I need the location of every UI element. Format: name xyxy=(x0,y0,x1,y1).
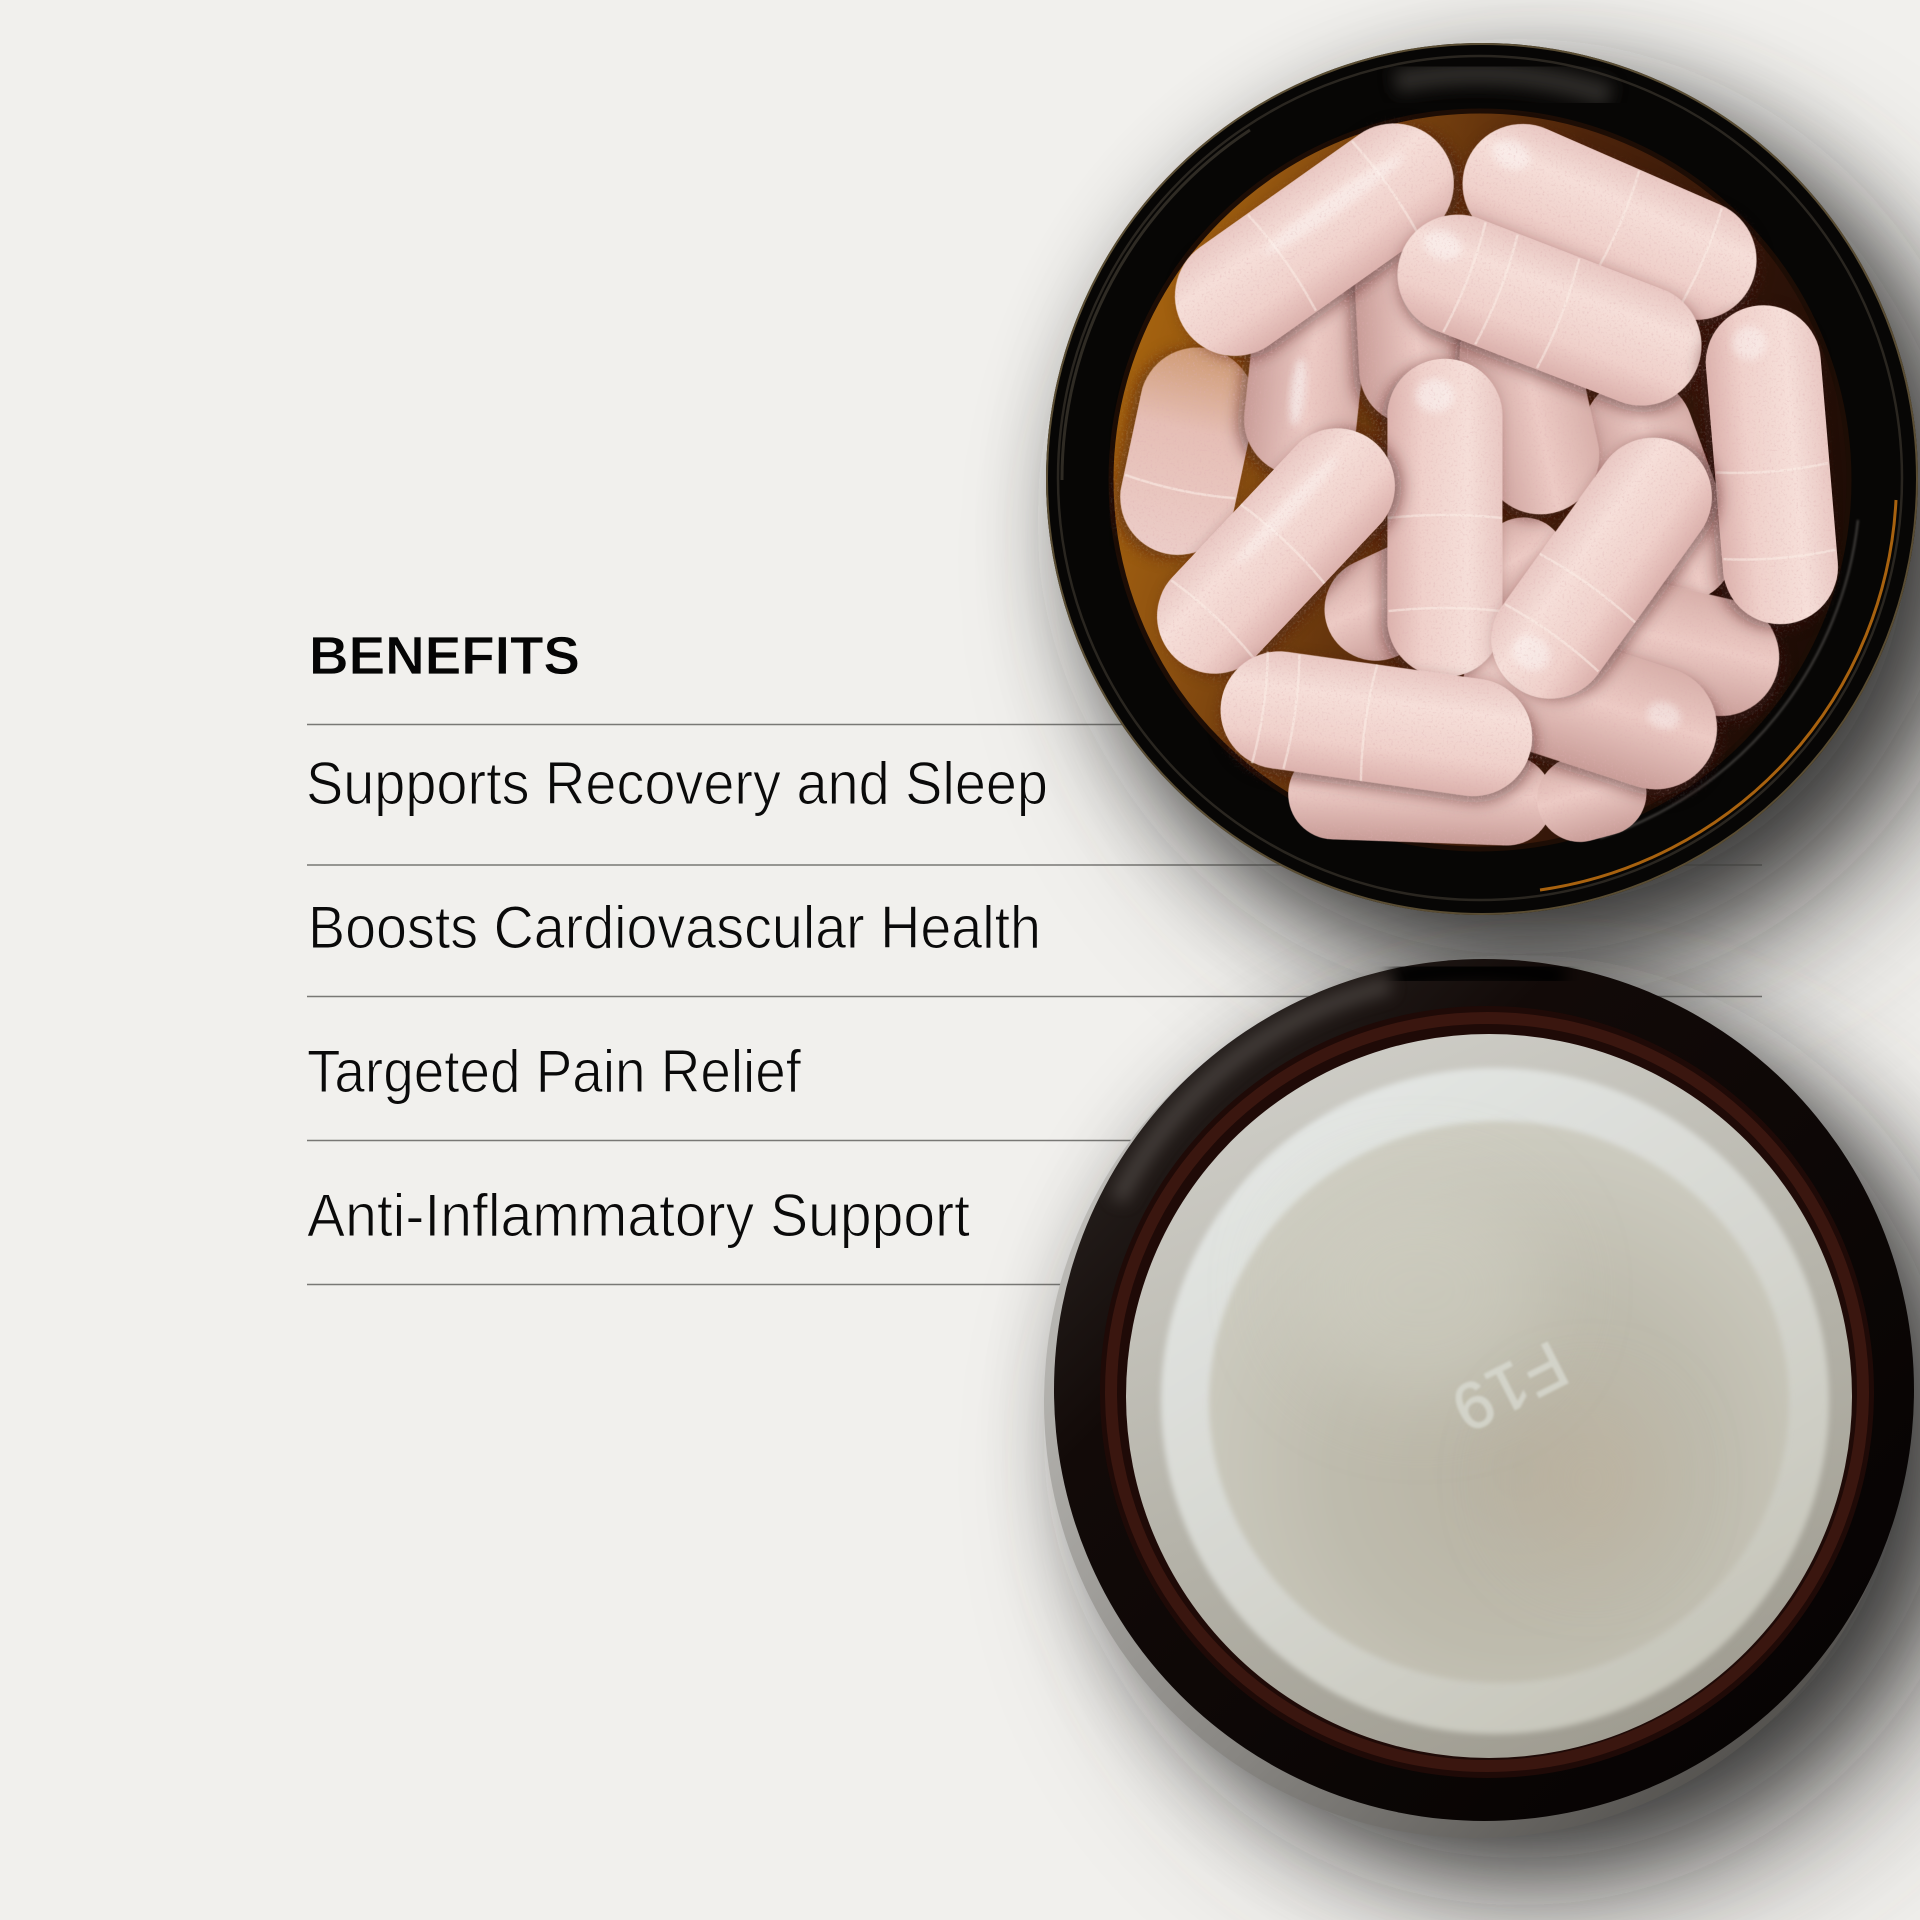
lid rim xyxy=(1054,959,1914,1821)
capsule centre vertical xyxy=(1387,359,1502,677)
rear capsules xyxy=(1110,213,1791,852)
warm glow on liner xyxy=(1520,1400,1660,1560)
benefit: recovery and sleep: Supports Recovery and Sleep xyxy=(306,750,1048,817)
liner outer disc xyxy=(1126,1034,1852,1758)
liner centre disc xyxy=(1209,1121,1789,1683)
benefit: pain relief: Targeted Pain Relief xyxy=(307,1038,801,1105)
liner pale ring xyxy=(1161,1068,1829,1734)
brown inner ring xyxy=(1100,1006,1874,1778)
moulded mark: F19: F19 xyxy=(1441,1327,1579,1447)
capsule middle xyxy=(1380,197,1719,423)
open jar with capsules xyxy=(1046,43,1918,915)
front capsules xyxy=(1133,100,1843,804)
capsule lower right diagonal xyxy=(1468,415,1735,722)
inner lip highlight xyxy=(1600,520,1858,838)
lid side wall xyxy=(1044,966,1908,1838)
soft light on liner xyxy=(1290,1180,1550,1400)
heading: benefits: BENEFITS xyxy=(309,626,580,686)
divider rules xyxy=(307,724,1762,1284)
benefit: anti-inflammatory: Anti-Inflammatory Support xyxy=(307,1182,970,1249)
capsule top right xyxy=(1444,105,1776,339)
capsule lower left diagonal xyxy=(1133,405,1419,697)
cast shadows xyxy=(1084,84,1920,1900)
jar lid, underside xyxy=(1044,959,1914,1838)
capsule left, fading into glass xyxy=(1110,337,1266,566)
benefit: cardiovascular health: Boosts Cardiovascular Health xyxy=(308,894,1041,961)
jar rim xyxy=(1046,43,1918,915)
capsule right xyxy=(1701,301,1843,629)
amber edge line xyxy=(1540,500,1896,890)
rim highlights xyxy=(1118,969,1565,1200)
benefits list xyxy=(306,750,1048,1249)
specular on rear capsule xyxy=(1287,357,1309,427)
capsules xyxy=(1110,100,1843,852)
capsule top left xyxy=(1151,100,1477,380)
capsule bottom xyxy=(1213,644,1540,804)
amber glass interior xyxy=(1111,111,1849,849)
